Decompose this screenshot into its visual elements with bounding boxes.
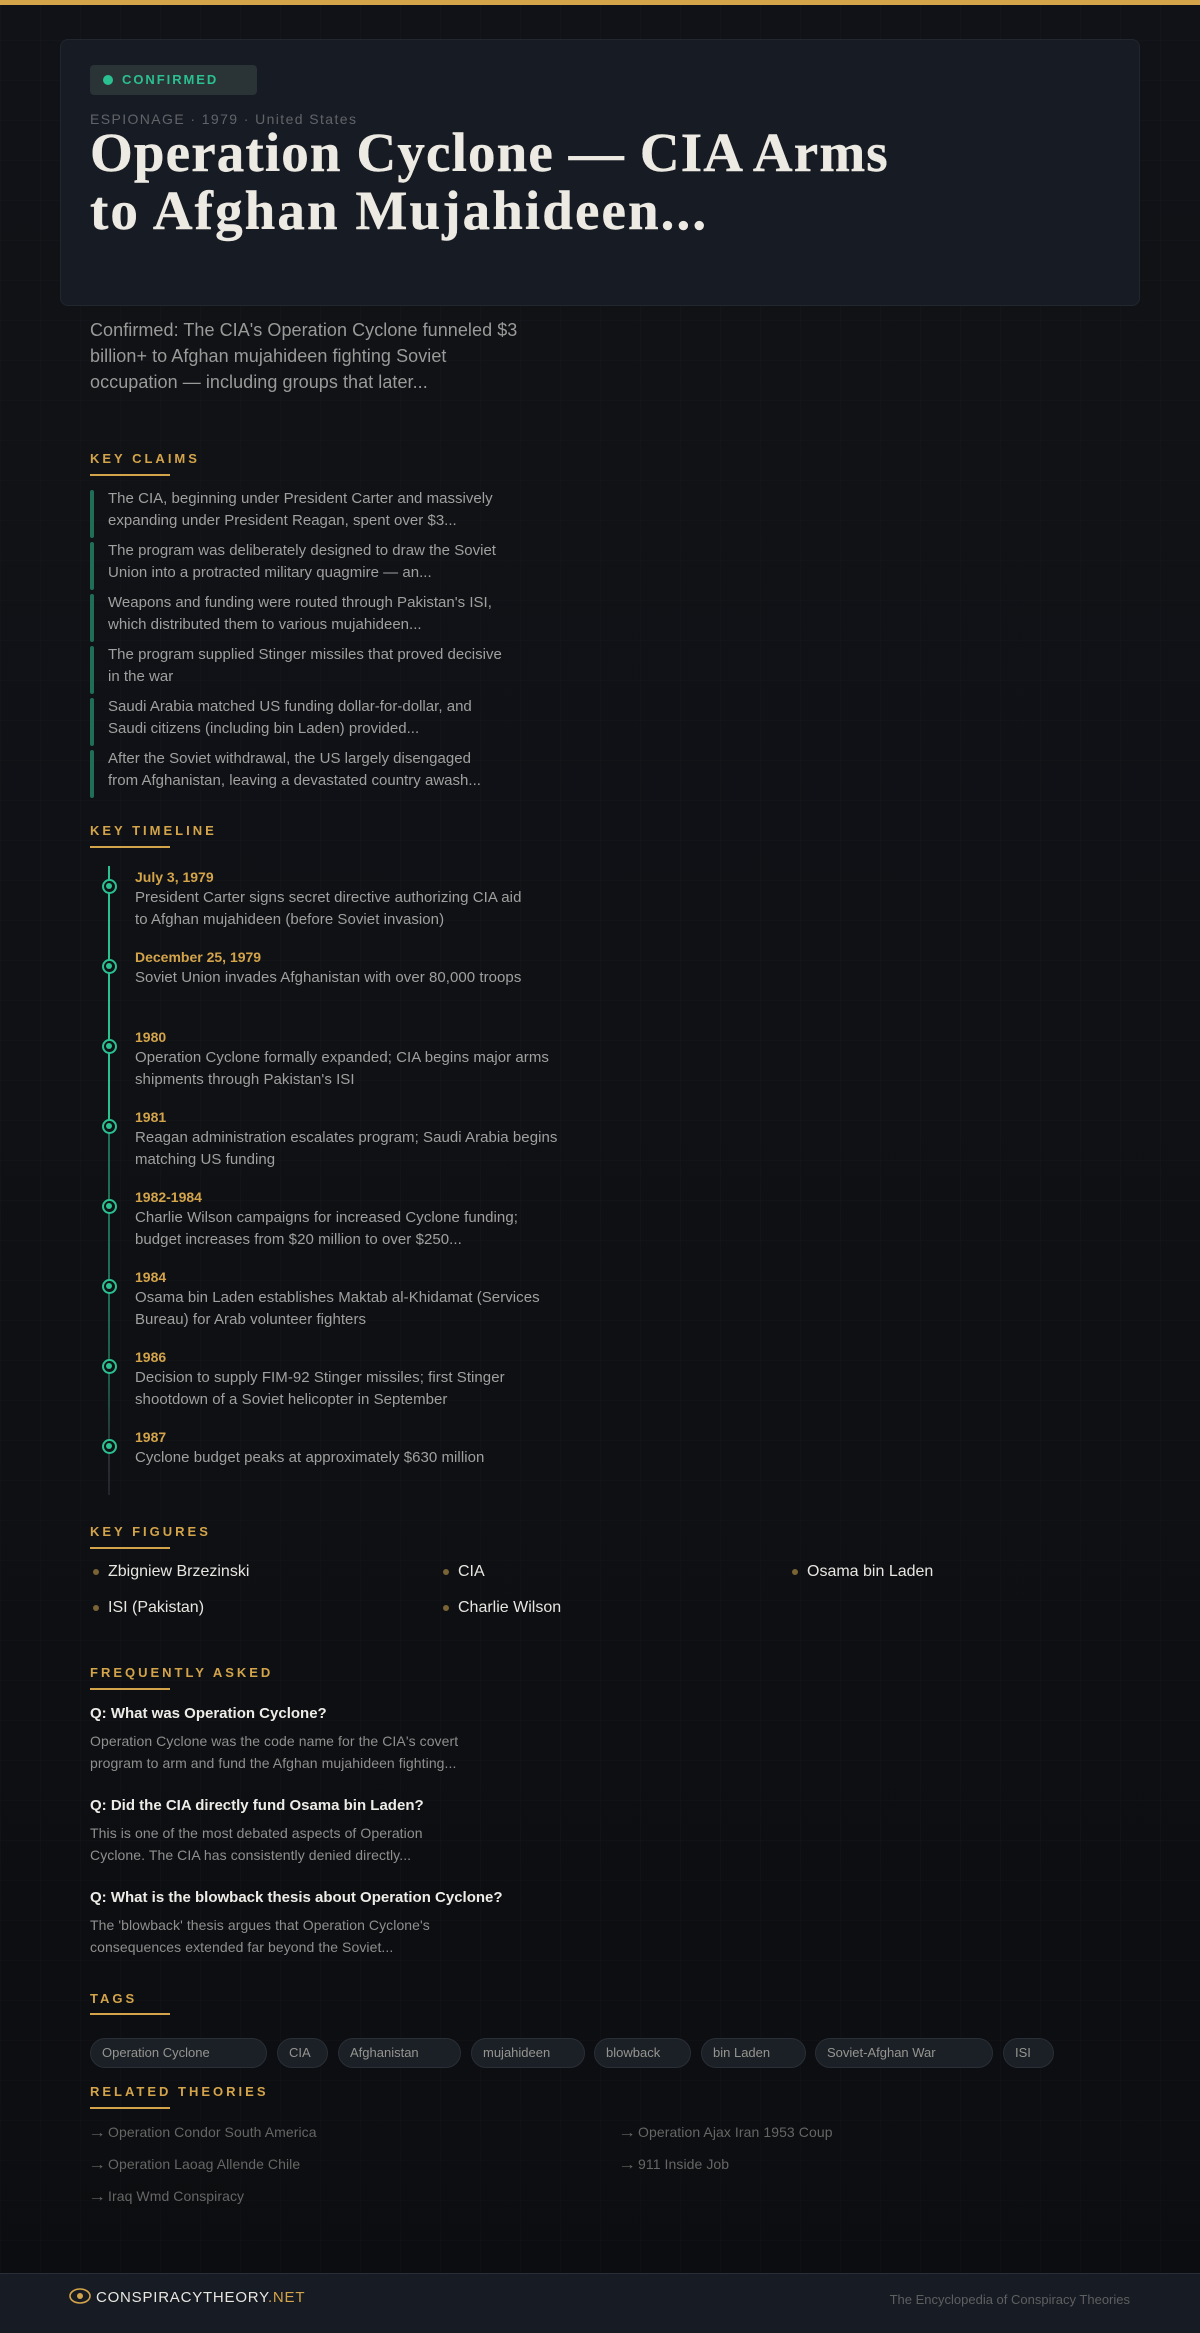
event: 1982-1984: budget increases from $20 million to over $250...	[135, 1231, 462, 1248]
heading: key figures: KEY FIGURES	[90, 1524, 211, 1539]
tag	[1003, 2038, 1054, 2068]
event: 1980	[102, 1029, 549, 1088]
event: 1984: 1984	[135, 1269, 166, 1285]
FAQ 2: Cyclone. The CIA has consistently denied directly...	[90, 1847, 411, 1863]
claim 6: After the Soviet withdrawal, the US largely disengaged	[108, 750, 471, 767]
footer	[0, 2273, 1200, 2333]
heading: key timeline: KEY TIMELINE	[90, 823, 217, 838]
event: 1986: shootdown of a Soviet helicopter in September	[135, 1391, 447, 1408]
heading: key claims: KEY CLAIMS	[90, 451, 200, 466]
event: July 3, 1979: July 3, 1979	[135, 869, 214, 885]
event: 1984	[102, 1269, 540, 1328]
tag	[471, 2038, 585, 2068]
tag	[594, 2038, 691, 2068]
event: December 25, 1979: December 25, 1979	[135, 949, 261, 965]
event: 1982-1984: 1982-1984	[135, 1189, 202, 1205]
related link: Operation Ajax Iran 1953 Coup	[638, 2124, 833, 2140]
FAQ 1: program to arm and fund the Afghan mujahideen fighting...	[90, 1755, 456, 1771]
tag: CIA	[289, 2045, 311, 2060]
panel: related theories	[88, 2124, 833, 2204]
tag: mujahideen	[483, 2045, 550, 2060]
footer tagline: The Encyclopedia of Conspiracy Theories	[890, 2292, 1130, 2307]
tag: blowback	[606, 2045, 660, 2060]
event: 1982-1984	[102, 1189, 518, 1248]
claim 4: in the war	[108, 668, 173, 685]
top accent bar	[0, 0, 1200, 5]
FAQ 3	[90, 1889, 503, 1955]
claim 2: Union into a protracted military quagmire — an...	[108, 564, 432, 581]
claim 5: Saudi citizens (including bin Laden) provided...	[108, 720, 419, 737]
tag: bin Laden	[713, 2045, 770, 2060]
event: 1981: matching US funding	[135, 1151, 275, 1168]
logo wordmark: CONSPIRACYTHEORY.NET	[96, 2289, 305, 2306]
figure: Zbigniew Brzezinski: Zbigniew Brzezinski	[108, 1563, 249, 1580]
claim 1: The CIA, beginning under President Carter and massively	[108, 490, 493, 507]
figure: CIA	[443, 1563, 485, 1580]
heading: related theories: RELATED THEORIES	[90, 2084, 268, 2099]
claim 6	[90, 750, 481, 798]
claim 4	[90, 646, 502, 694]
event: 1981	[102, 1109, 557, 1168]
figure: Osama bin Laden: Osama bin Laden	[807, 1563, 933, 1580]
FAQ 1	[90, 1705, 458, 1771]
panel: hero header	[60, 39, 1140, 306]
event: 1984: Osama bin Laden establishes Maktab al-Khidamat (Services	[135, 1289, 540, 1306]
event: December 25, 1979	[102, 949, 521, 986]
tag	[338, 2038, 461, 2068]
title: to Afghan Mujahideen...	[90, 180, 708, 241]
tag: Afghanistan	[350, 2045, 419, 2060]
tag	[277, 2038, 328, 2068]
event: 1982-1984: Charlie Wilson campaigns for increased Cyclone funding;	[135, 1209, 518, 1226]
claim 2	[90, 542, 496, 590]
tag: Operation Cyclone	[102, 2045, 210, 2060]
related link: →	[618, 2156, 636, 2172]
FAQ 1: Q: What was Operation Cyclone?	[90, 1705, 327, 1722]
event: July 3, 1979: President Carter signs secret directive authorizing CIA aid	[135, 889, 521, 906]
claim 3	[90, 594, 492, 642]
event: July 3, 1979	[102, 869, 521, 928]
figure: CIA: CIA	[458, 1563, 485, 1580]
icon: eye logo	[69, 2287, 91, 2305]
event: 1987	[102, 1429, 484, 1466]
FAQ 2	[90, 1797, 424, 1863]
related link: Iraq Wmd Conspiracy	[108, 2188, 244, 2204]
claim 5	[90, 698, 472, 746]
panel: timeline	[102, 866, 557, 1495]
panel: tags	[90, 2038, 1054, 2068]
related link: →	[88, 2156, 106, 2172]
claim 5: Saudi Arabia matched US funding dollar-for-dollar, and	[108, 698, 472, 715]
badge label: CONFIRMED	[122, 72, 218, 87]
event: 1981: 1981	[135, 1109, 166, 1125]
event: 1987: Cyclone budget peaks at approximately $630 million	[135, 1449, 484, 1466]
event: 1987: 1987	[135, 1429, 166, 1445]
subtitle summary: billion+ to Afghan mujahideen fighting Soviet	[90, 346, 446, 366]
event: December 25, 1979: Soviet Union invades Afghanistan with over 80,000 troops	[135, 969, 521, 986]
claim 6: from Afghanistan, leaving a devastated country awash...	[108, 772, 481, 789]
subtitle summary: occupation — including groups that later...	[90, 372, 428, 392]
FAQ 3: consequences extended far beyond the Soviet...	[90, 1939, 393, 1955]
FAQ 3: The 'blowback' thesis argues that Operation Cyclone's	[90, 1917, 430, 1933]
subtitle summary	[90, 320, 517, 392]
FAQ 2: Q: Did the CIA directly fund Osama bin Laden?	[90, 1797, 424, 1814]
related link: 911 Inside Job	[638, 2156, 729, 2172]
event: 1980: Operation Cyclone formally expanded; CIA begins major arms	[135, 1049, 549, 1066]
event: July 3, 1979: to Afghan mujahideen (before Soviet invasion)	[135, 911, 444, 928]
FAQ 3: Q: What is the blowback thesis about Operation Cyclone?	[90, 1889, 503, 1906]
panel: key claims list	[90, 490, 502, 798]
panel: key figures list	[93, 1563, 933, 1616]
claim 1: expanding under President Reagan, spent over $3...	[108, 512, 457, 529]
tag	[701, 2038, 806, 2068]
tag: Soviet-Afghan War	[827, 2045, 936, 2060]
heading: frequently asked: FREQUENTLY ASKED	[90, 1665, 273, 1680]
tag	[90, 2038, 267, 2068]
category meta line: ESPIONAGE · 1979 · United States	[90, 111, 357, 127]
related link: Operation Laoag Allende Chile	[108, 2156, 300, 2172]
related link: →	[88, 2124, 106, 2140]
event: 1986: Decision to supply FIM-92 Stinger missiles; first Stinger	[135, 1369, 505, 1386]
claim 2: The program was deliberately designed to draw the Soviet	[108, 542, 496, 559]
tag: ISI	[1015, 2045, 1031, 2060]
event: 1981: Reagan administration escalates program; Saudi Arabia begins	[135, 1129, 557, 1146]
subtitle summary: Confirmed: The CIA's Operation Cyclone funneled $3	[90, 320, 517, 340]
event: 1986	[102, 1349, 505, 1408]
title: Operation Cyclone — CIA Arms	[90, 122, 889, 183]
event: 1986: 1986	[135, 1349, 166, 1365]
claim 3: Weapons and funding were routed through Pakistan's ISI,	[108, 594, 492, 611]
related link: Operation Condor South America	[108, 2124, 317, 2140]
timeline spine	[108, 866, 110, 1495]
title	[90, 122, 889, 242]
claim 1	[90, 490, 493, 538]
event: 1980: shipments through Pakistan's ISI	[135, 1071, 355, 1088]
tag	[815, 2038, 993, 2068]
heading: tags: TAGS	[90, 1991, 137, 2006]
claim 4: The program supplied Stinger missiles that proved decisive	[108, 646, 502, 663]
claim 3: which distributed them to various mujahideen...	[108, 616, 422, 633]
FAQ 2: This is one of the most debated aspects of Operation	[90, 1825, 423, 1841]
event: 1980: 1980	[135, 1029, 166, 1045]
figure: ISI (Pakistan): ISI (Pakistan)	[108, 1599, 204, 1616]
FAQ 1: Operation Cyclone was the code name for the CIA's covert	[90, 1733, 458, 1749]
related link: →	[618, 2124, 636, 2140]
icon: status dot	[103, 75, 113, 85]
status badge: confirmed	[90, 65, 257, 95]
figure: Charlie Wilson: Charlie Wilson	[458, 1599, 561, 1616]
related link: →	[88, 2188, 106, 2204]
event: 1984: Bureau) for Arab volunteer fighters	[135, 1311, 366, 1328]
